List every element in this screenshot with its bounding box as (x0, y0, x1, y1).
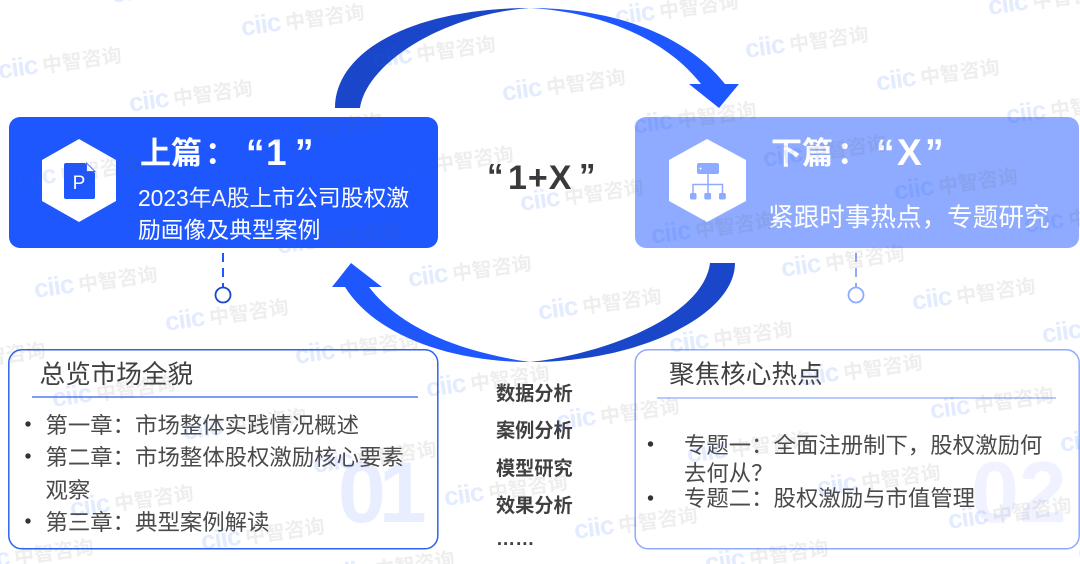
text: ciic中智咨询 (239, 0, 366, 42)
text: ciic中智咨询 (311, 432, 438, 479)
text: ciic中智咨询 (388, 137, 515, 184)
panel: 聚焦核心热点 (635, 350, 1079, 549)
text: ciic中智咨询 (163, 290, 290, 337)
text: ciic中智咨询 (667, 312, 794, 359)
text: ciic中智咨询 (68, 476, 195, 523)
text: ciic中智咨询 (946, 488, 1073, 535)
panel: 上篇 (9, 117, 438, 248)
heading: 下篇: ” (925, 132, 944, 173)
icon: document in hexagon: P (73, 173, 85, 194)
list: chapters: 第三章：典型案例解读 (46, 510, 269, 535)
list: topics: 专题一：全面注册制下，股权激励何 (684, 433, 1042, 458)
heading: 上篇 (140, 132, 314, 173)
connector: right dashed line and circle (848, 253, 864, 302)
list: chapters (25, 413, 404, 535)
text: ciic中智咨询 (145, 180, 272, 227)
text: ciic中智咨询 (910, 269, 1037, 316)
heading: 下篇: ： (837, 136, 868, 171)
title: 1+X: “ (487, 157, 504, 194)
text: ciic中智咨询 (874, 50, 1001, 97)
text: ciic中智咨询 (275, 213, 402, 260)
text: ciic中智咨询 (536, 279, 663, 326)
text: ciic中智咨询 (554, 389, 681, 436)
text: ciic中智咨询 (631, 93, 758, 140)
number: 01: 01 (338, 445, 425, 541)
heading: 上篇: ： (205, 136, 236, 171)
title: 1+X (487, 157, 596, 197)
list: research methods (496, 383, 573, 550)
icon: document in hexagon (42, 139, 116, 222)
text: ciic中智咨询 (127, 71, 254, 118)
text: ciic中智咨询 (779, 236, 906, 283)
text: 上篇 description: 励画像及典型案例 (138, 217, 320, 243)
text: ciic中智咨询 (761, 126, 888, 173)
list: research methods: …… (496, 529, 534, 550)
text: ciic中智咨询 (572, 498, 699, 545)
icon: hierarchy in hexagon (669, 139, 746, 222)
heading: 上篇: “ (246, 132, 264, 173)
text: ciic中智咨询 (743, 17, 870, 64)
text: ciic中智咨询 (370, 27, 497, 74)
panel: 下篇 (635, 117, 1079, 248)
text: ciic中智咨询 (181, 399, 308, 446)
text: ciic中智咨询 (406, 246, 533, 293)
text: ciic中智咨询 (50, 366, 177, 413)
list: chapters: 观察 (46, 478, 90, 503)
text: ciic中智咨询 (442, 465, 569, 512)
heading: 下篇: “ (876, 132, 894, 173)
arrow: bottom arc from 下篇 to 上篇 (332, 263, 735, 362)
list: chapters: 第一章：市场整体实践情况概述 (46, 413, 359, 438)
list: topics (648, 433, 1042, 511)
text: ciic中智咨询 (424, 356, 551, 403)
panel: 总览市场全貌 (9, 350, 438, 549)
heading: 上篇: 1 (266, 132, 287, 173)
text: ciic中智咨询 (649, 203, 776, 250)
list: chapters: 第二章：市场整体股权激励核心要素 (46, 445, 404, 470)
list: topics: 专题二：股权激励与市值管理 (684, 486, 975, 511)
text: ciic中智咨询 (32, 257, 159, 304)
text: ciic中智咨询 (797, 345, 924, 392)
text: ciic中智咨询 (685, 422, 812, 469)
heading: 下篇: 下篇 (771, 136, 833, 171)
text: ciic中智咨询 (500, 60, 627, 107)
heading: 下篇: X (897, 132, 922, 173)
text: 上篇 description: 2023年A股上市公司股权激 (138, 185, 409, 211)
heading: 上篇: ” (295, 132, 314, 173)
text: ciic中智咨询 (815, 455, 942, 502)
number: 02: 02 (971, 445, 1067, 541)
heading: 聚焦核心热点: 聚焦核心热点 (669, 360, 823, 389)
text: ciic中智咨询 (892, 159, 1019, 206)
text: ciic中智咨询 (257, 104, 384, 151)
list: research methods: 效果分析 (496, 495, 573, 517)
title: 1+X: ” (579, 157, 596, 194)
list: research methods: 模型研究 (496, 457, 573, 480)
heading: 下篇 (771, 132, 944, 173)
list: research methods: 案例分析 (496, 419, 573, 442)
connector: left dashed line and circle (216, 253, 230, 302)
text: ciic中智咨询 (293, 323, 420, 370)
text: 下篇 description: 紧跟时事热点，专题研究 (768, 203, 1050, 232)
text: ciic中智咨询 (199, 509, 326, 556)
text: ciic中智咨询 (518, 170, 645, 217)
list: topics: 去何从？ (684, 461, 774, 486)
text: ciic中智咨询 (928, 378, 1055, 425)
list: research methods: 数据分析 (496, 383, 573, 405)
title: 1+X: 1+X (508, 159, 572, 197)
heading: 上篇: 上篇 (140, 136, 202, 171)
heading: 总览市场全貌: 总览市场全貌 (40, 360, 193, 389)
arrow: top arc from 上篇 to 下篇 (335, 8, 739, 108)
text: ciic中智咨询 (14, 147, 141, 194)
